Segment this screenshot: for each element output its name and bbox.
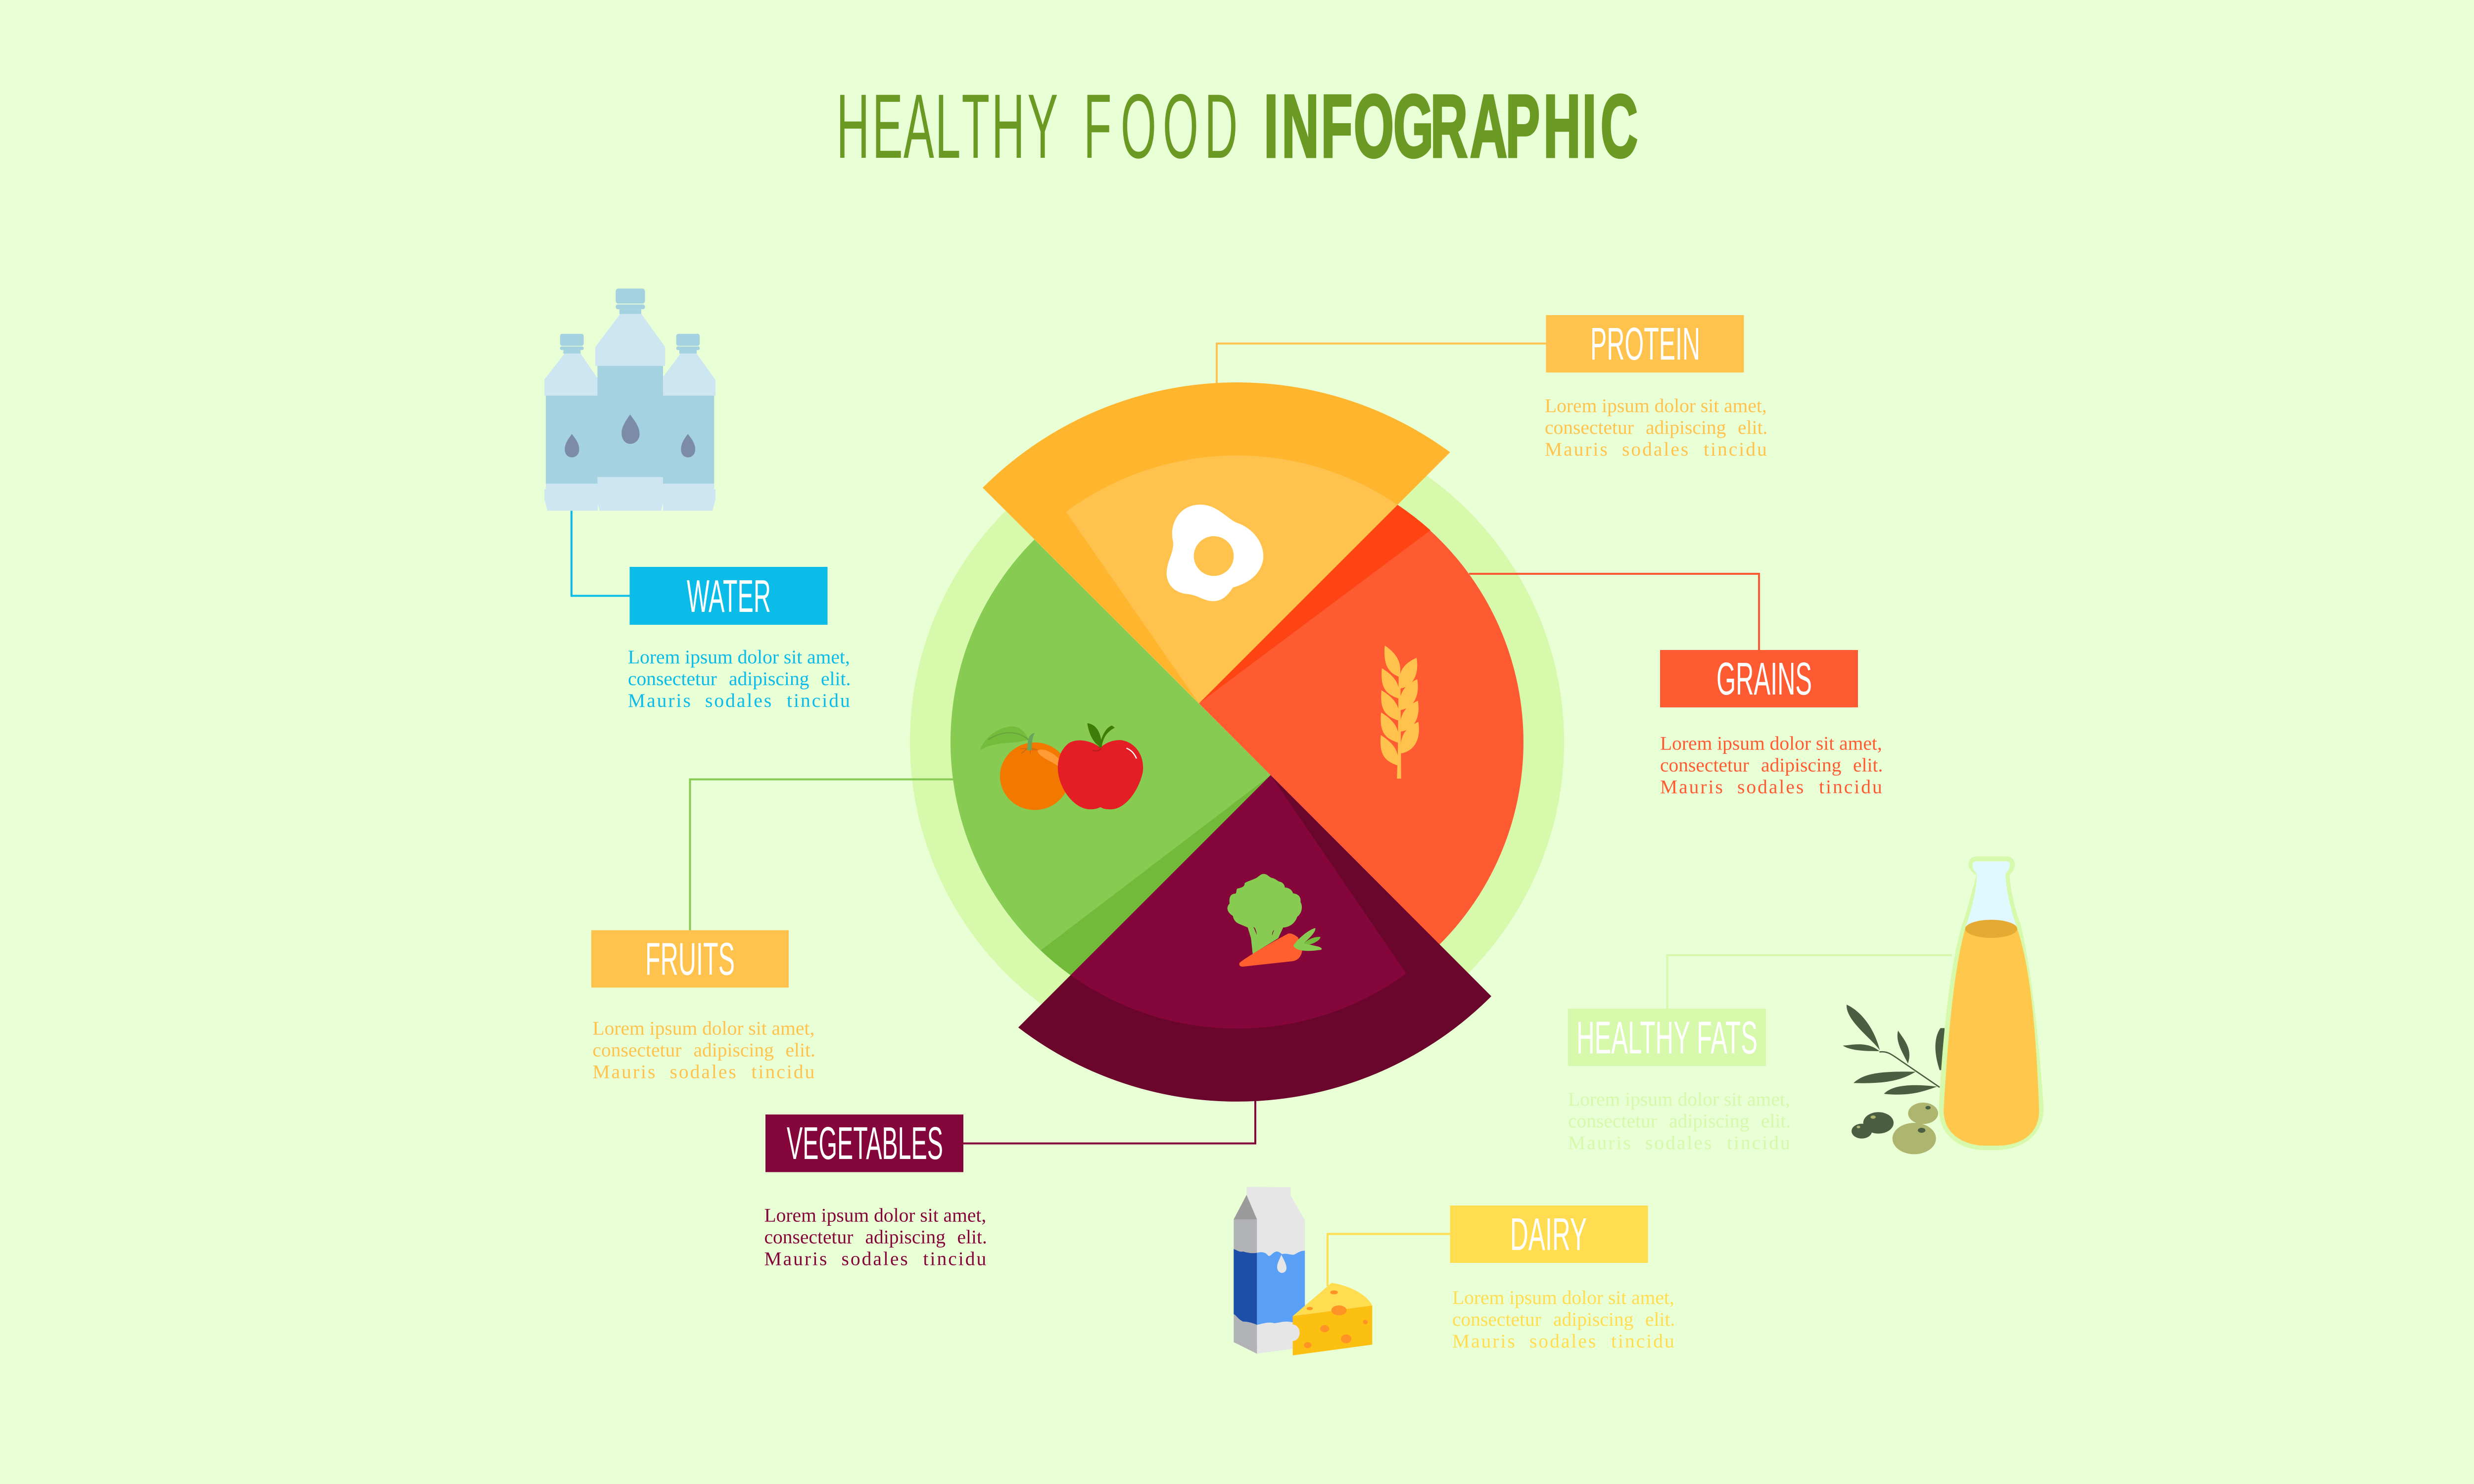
pie chart bbox=[910, 382, 1564, 1102]
middle bottle bbox=[595, 288, 665, 510]
panel: healthy fats bbox=[1568, 1009, 1792, 1154]
icon: milk carton bbox=[1234, 1187, 1305, 1354]
text block: protein: Mauris bbox=[1545, 438, 1616, 460]
icon: olive branch and olives bbox=[1843, 1005, 1945, 1154]
text block: vegetables: tincidu bbox=[923, 1248, 988, 1269]
text block: dairy: adipiscing bbox=[1553, 1308, 1638, 1330]
text block: grains bbox=[1660, 732, 1884, 797]
text block: protein: tincidu bbox=[1704, 438, 1768, 460]
text block: protein: consectetur bbox=[1545, 417, 1639, 438]
panel: grains bbox=[1660, 650, 1884, 797]
text block: healthy fats: adipiscing bbox=[1669, 1110, 1754, 1132]
text block: vegetables: Mauris bbox=[764, 1248, 835, 1269]
text block: dairy: sodales bbox=[1529, 1330, 1604, 1352]
icon: cheese wedge bbox=[1286, 1283, 1372, 1355]
title: INFOGRAPHIC bbox=[1264, 77, 1638, 176]
icon: fried egg bbox=[1167, 505, 1263, 601]
text block: protein: elit. bbox=[1738, 417, 1767, 438]
text block: fruits: Lorem ipsum dolor sit amet, bbox=[593, 1017, 814, 1039]
text block: water: adipiscing bbox=[729, 668, 814, 690]
label: fruits: FRUITS bbox=[645, 933, 735, 984]
text block: fruits: Mauris bbox=[593, 1061, 663, 1082]
text block: fruits: elit. bbox=[786, 1039, 815, 1061]
text block: vegetables: elit. bbox=[957, 1226, 987, 1248]
icon: orange and apple bbox=[980, 723, 1143, 810]
text block: vegetables bbox=[764, 1204, 988, 1269]
label: water: WATER bbox=[687, 570, 771, 622]
text block: grains: adipiscing bbox=[1761, 754, 1846, 776]
text block: water: sodales bbox=[705, 690, 779, 711]
text block: dairy: tincidu bbox=[1611, 1330, 1676, 1352]
text block: healthy fats: tincidu bbox=[1727, 1132, 1792, 1154]
text block: dairy: elit. bbox=[1645, 1308, 1675, 1330]
text block: fruits: sodales bbox=[670, 1061, 744, 1082]
text block: fruits: consectetur bbox=[593, 1039, 686, 1061]
text block: grains: Mauris bbox=[1660, 776, 1731, 797]
icon: oil bottle bbox=[1939, 856, 2044, 1150]
title bbox=[836, 75, 1638, 177]
label: dairy: DAIRY bbox=[1510, 1208, 1587, 1260]
text block: water: Lorem ipsum dolor sit amet, bbox=[628, 646, 850, 668]
text block: dairy: Mauris bbox=[1452, 1330, 1523, 1352]
text block: dairy: Lorem ipsum dolor sit amet, bbox=[1452, 1287, 1674, 1308]
text block: grains: consectetur bbox=[1660, 754, 1754, 776]
text block: healthy fats: Lorem ipsum dolor sit amet, bbox=[1568, 1088, 1790, 1110]
label: dairy bbox=[1450, 1206, 1648, 1263]
label: vegetables: VEGETABLES bbox=[787, 1117, 943, 1169]
text block: protein bbox=[1545, 395, 1768, 460]
text block: grains: sodales bbox=[1737, 776, 1811, 797]
text block: dairy bbox=[1452, 1287, 1676, 1352]
text block: water: tincidu bbox=[787, 690, 852, 711]
text block: vegetables: Lorem ipsum dolor sit amet, bbox=[764, 1204, 986, 1226]
text block: water: consectetur bbox=[628, 668, 722, 690]
slice: fruits bbox=[951, 540, 1271, 975]
text block: vegetables: consectetur bbox=[764, 1226, 858, 1248]
text block: healthy fats bbox=[1568, 1088, 1792, 1154]
label: grains bbox=[1660, 650, 1858, 707]
panel: dairy bbox=[1450, 1206, 1676, 1352]
slice: vegetables bbox=[1018, 775, 1491, 1102]
text block: fruits: tincidu bbox=[751, 1061, 816, 1082]
label: healthy fats: HEALTHY FATS bbox=[1576, 1012, 1758, 1064]
label: vegetables bbox=[765, 1114, 963, 1172]
text block: grains: elit. bbox=[1853, 754, 1883, 776]
text block: water: Mauris bbox=[628, 690, 699, 711]
connector lines bbox=[571, 343, 1952, 1286]
text block: healthy fats: consectetur bbox=[1568, 1110, 1662, 1132]
label: healthy fats bbox=[1568, 1009, 1766, 1066]
text block: healthy fats: Mauris bbox=[1568, 1132, 1639, 1154]
label: fruits bbox=[591, 930, 789, 987]
text block: protein: Lorem ipsum dolor sit amet, bbox=[1545, 395, 1767, 417]
text block: grains: tincidu bbox=[1819, 776, 1884, 797]
text block: water bbox=[628, 646, 852, 711]
panel: protein bbox=[1545, 315, 1768, 460]
text block: vegetables: sodales bbox=[841, 1248, 916, 1269]
pale backing circle bbox=[910, 415, 1564, 1069]
label: grains: GRAINS bbox=[1716, 653, 1812, 704]
panel: fruits bbox=[591, 930, 816, 1082]
icon: wheat bbox=[1380, 646, 1419, 779]
text block: water: elit. bbox=[821, 668, 851, 690]
text block: protein: adipiscing bbox=[1646, 417, 1731, 438]
slice: protein bbox=[983, 382, 1450, 703]
text block: fruits: adipiscing bbox=[694, 1039, 779, 1061]
text block: healthy fats: elit. bbox=[1761, 1110, 1791, 1132]
text block: grains: Lorem ipsum dolor sit amet, bbox=[1660, 732, 1882, 754]
slice: grains bbox=[1199, 505, 1523, 944]
label: water bbox=[629, 567, 827, 625]
panel: vegetables bbox=[764, 1114, 988, 1269]
icon: water bottles bbox=[544, 288, 715, 510]
right bottle bbox=[663, 334, 715, 510]
text block: fruits bbox=[593, 1017, 816, 1082]
text block: healthy fats: sodales bbox=[1645, 1132, 1719, 1154]
panel: water bbox=[628, 567, 852, 711]
left bottle bbox=[544, 334, 598, 510]
label: protein: PROTEIN bbox=[1590, 318, 1700, 370]
text block: vegetables: adipiscing bbox=[865, 1226, 951, 1248]
text block: protein: sodales bbox=[1622, 438, 1696, 460]
label: protein bbox=[1546, 315, 1744, 372]
text block: dairy: consectetur bbox=[1452, 1308, 1546, 1330]
title: HEALTHY FOOD bbox=[836, 75, 1237, 177]
icon: broccoli and carrot bbox=[1228, 874, 1322, 967]
